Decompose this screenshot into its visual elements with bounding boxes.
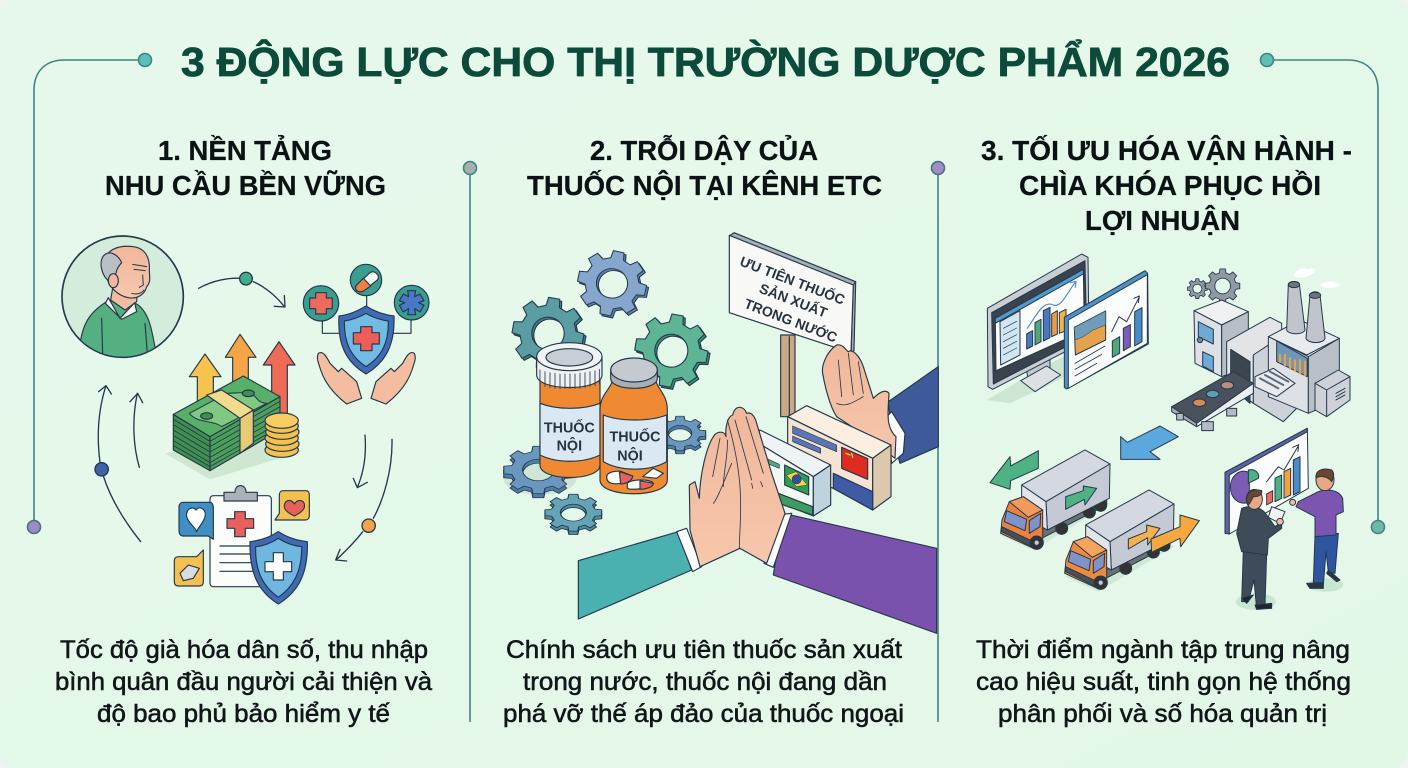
- panel: nền tảng nhu cầu: [55, 134, 432, 728]
- icon: bottle small: [600, 358, 667, 494]
- icon: analytics board: [1225, 428, 1308, 534]
- icon: bottle large: NỘI: [557, 437, 582, 455]
- icon: policy sign: TRONG NƯỚC: [742, 294, 840, 345]
- divider 1: [464, 162, 476, 722]
- icon: imported drug box Brazil: [753, 430, 831, 516]
- icon: policy sign: [729, 233, 856, 417]
- icon: truck 1: [1000, 450, 1110, 550]
- left frame line: [28, 54, 152, 534]
- icon: bottle small: NỘI: [617, 447, 643, 465]
- arrow: orange flow: [1151, 515, 1199, 552]
- body text 3: [976, 636, 1351, 728]
- arrow: cycle top: [199, 272, 285, 307]
- body text 2: Chính sách ưu tiên thuốc sản xuất: [506, 636, 902, 664]
- icon: people reviewing data: [1236, 469, 1343, 610]
- body text 1: Tốc độ già hóa dân số, thu nhập: [60, 636, 428, 664]
- body text 3: Thời điểm ngành tập trung nâng: [976, 636, 1350, 664]
- heading 2: THUỐC NỘI TẠI KÊNH ETC: [527, 169, 882, 201]
- icon: right raised hand: [822, 345, 938, 463]
- divider 2: [932, 162, 944, 722]
- panel: tối ưu hóa vận hành: [976, 134, 1352, 728]
- icon: clipboard with shield: [174, 486, 309, 604]
- icon: left sleeve: [578, 528, 702, 619]
- icon: truck 2: [1065, 490, 1174, 592]
- icon: report window: [1064, 271, 1148, 389]
- title: 3 ĐỘNG LỰC CHO THỊ TRƯỜNG DƯỢC PHẨM 2026: [181, 38, 1230, 85]
- icon: monitor dashboard: [987, 254, 1089, 403]
- icon: pressed hands: [689, 407, 785, 567]
- body text 3: phân phối và số hóa quản trị: [998, 700, 1327, 728]
- illustration 2: [503, 233, 938, 633]
- heading 2: 2. TRỖI DẬY CỦA: [590, 134, 818, 166]
- illustration 3: [987, 254, 1350, 610]
- icon: factory with conveyor: [1172, 268, 1350, 431]
- body text 1: [55, 636, 432, 728]
- body text 2: [503, 636, 904, 728]
- heading 3: [981, 134, 1352, 236]
- panel: thuốc nội kênh ETC: [503, 134, 938, 728]
- icon: bottle large: THUỐC: [544, 418, 595, 436]
- body text 1: bình quân đầu người cải thiện và: [55, 668, 432, 696]
- icon: insurance shield with hands: [303, 264, 429, 404]
- illustration 1: [62, 236, 429, 604]
- icon: policy sign: ƯU TIÊN THUỐC: [738, 252, 848, 308]
- icon: rising income money stack: [165, 334, 302, 479]
- heading 3: CHÌA KHÓA PHỤC HỒI: [1019, 170, 1321, 201]
- icon: bottle large: [537, 343, 602, 477]
- body text 2: phá vỡ thế áp đảo của thuốc ngoại: [503, 700, 904, 728]
- heading 3: 3. TỐI ƯU HÓA VẬN HÀNH -: [981, 134, 1352, 166]
- body text 1: độ bao phủ bảo hiểm y tế: [97, 700, 390, 728]
- arrow: cycle left: [95, 386, 143, 542]
- heading 1: [105, 134, 386, 201]
- arrow: blue flow: [1121, 426, 1178, 459]
- icon: imported drug box China: [788, 406, 891, 510]
- body text 2: trong nước, thuốc nội đang dần: [523, 668, 887, 696]
- heading 1: NHU CẦU BỀN VỮNG: [105, 170, 386, 201]
- icon: elderly man: [62, 236, 183, 363]
- icon: right sleeve: [764, 513, 937, 633]
- icon: policy sign: SẢN XUẤT: [757, 280, 830, 321]
- heading 1: 1. NỀN TẢNG: [158, 134, 332, 166]
- icon: bottle small: THUỐC: [610, 428, 660, 446]
- right frame line: [1260, 54, 1384, 534]
- icon: gears: [503, 245, 715, 534]
- arrow: cycle right: [336, 435, 392, 561]
- heading 2: [527, 134, 882, 201]
- body text 3: cao hiệu suất, tinh gọn hệ thống: [976, 668, 1351, 696]
- arrow: green flow: [990, 451, 1038, 489]
- heading 3: LỢI NHUẬN: [1085, 205, 1240, 236]
